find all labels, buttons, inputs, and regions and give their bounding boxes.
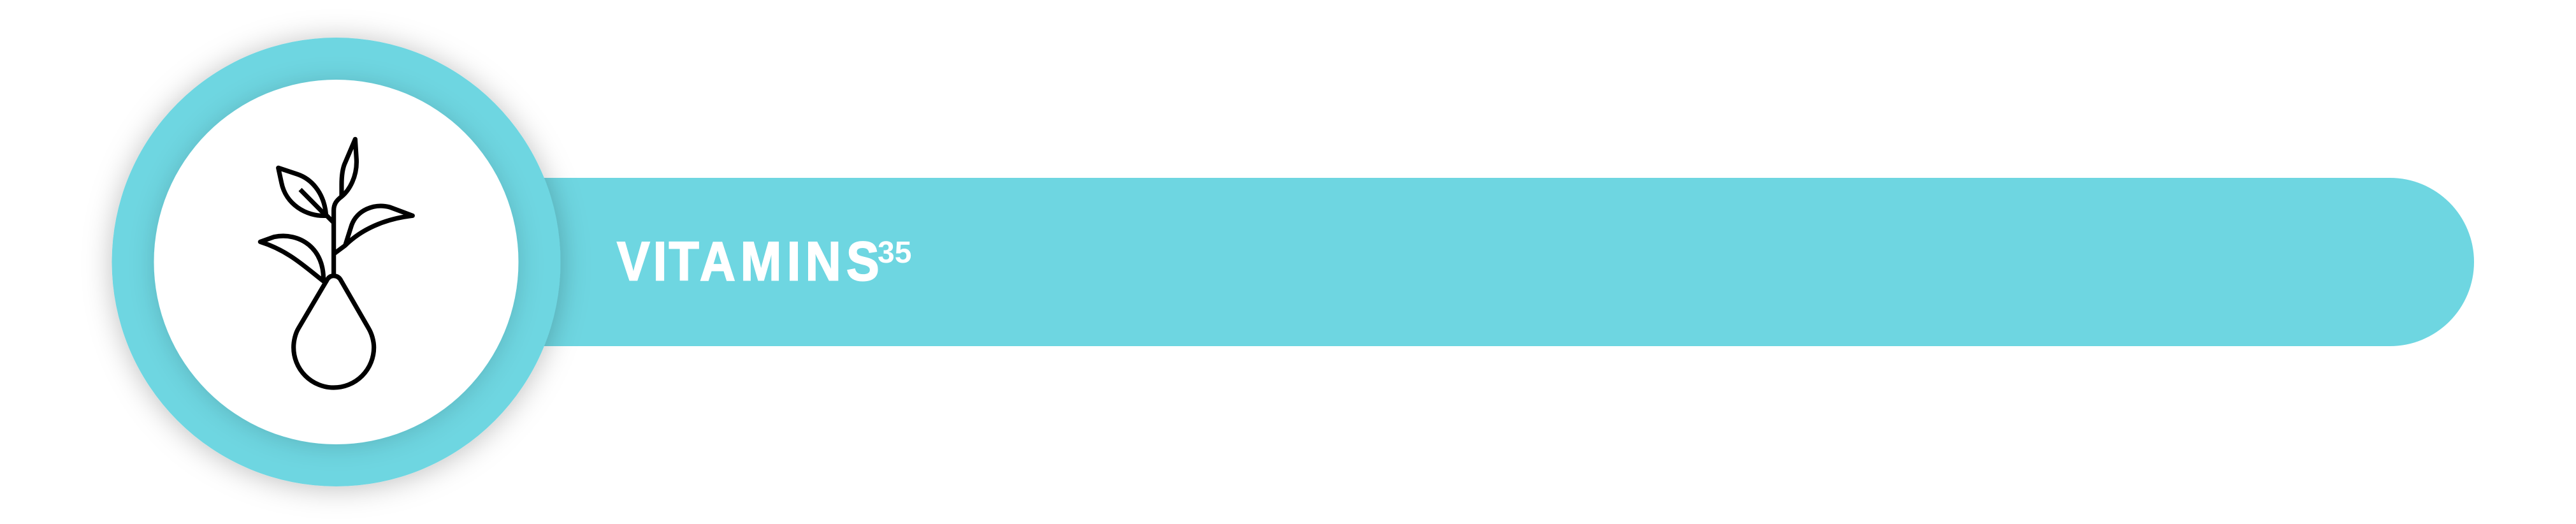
lower left leaf bbox=[260, 236, 324, 282]
superscript reference: 35 bbox=[878, 236, 911, 270]
upper left leaf bbox=[279, 168, 334, 222]
icon: plant sprouting from a drop bbox=[260, 139, 412, 388]
drop bbox=[294, 276, 374, 388]
outer circle ring bbox=[112, 38, 561, 486]
heading: vitamins: VITAMINS bbox=[617, 231, 879, 292]
top leaf bbox=[342, 139, 356, 196]
inner white circle bbox=[154, 80, 519, 444]
stem bbox=[334, 196, 342, 276]
leaf vein bbox=[300, 189, 325, 215]
right leaf bbox=[334, 206, 412, 254]
banner bar bbox=[497, 178, 2474, 346]
